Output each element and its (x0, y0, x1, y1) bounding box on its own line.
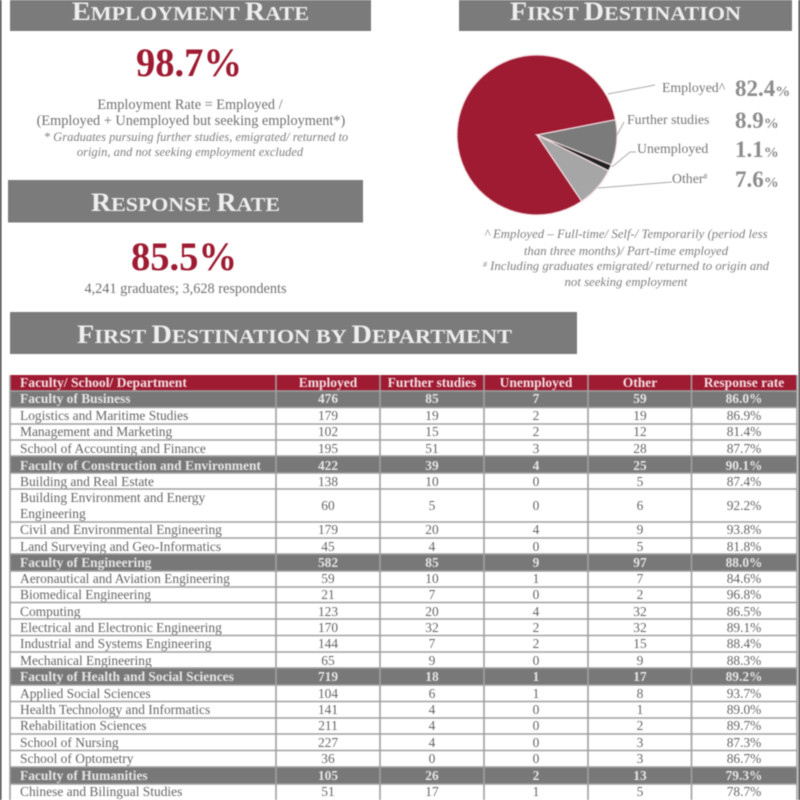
row: health technology (20, 702, 761, 717)
row: electrical: 32 (633, 620, 647, 635)
table header row: Further studies (388, 375, 476, 390)
row: management: 15 (425, 424, 439, 439)
pie footnotes: than three months)/ Part-time employed (524, 244, 729, 258)
row: aeronautical (20, 571, 761, 586)
faculty row: health: Faculty of Health and Social Sciences (20, 669, 234, 684)
row: industrial: Industrial and Systems Engineering (20, 636, 212, 651)
row: civil: 93.8% (727, 522, 761, 537)
row: nursing: 3 (637, 735, 644, 750)
row: optometry: School of Optometry (20, 751, 134, 766)
row: logistics: 86.9% (727, 408, 761, 423)
row: mechanical: 65 (321, 653, 335, 668)
row: aeronautical: 59 (321, 571, 335, 586)
faculty row: construction: 39 (425, 458, 439, 473)
table header row: Unemployed (500, 375, 573, 390)
row: mechanical (20, 653, 761, 668)
legend: other: Other (672, 171, 703, 186)
table: first destination by department (10, 375, 797, 800)
employment rate formula (37, 97, 346, 129)
row: nursing: 0 (533, 735, 540, 750)
row: building environment: Building Environment and Energy (20, 490, 206, 505)
row: building real estate: 5 (637, 474, 644, 489)
legend: further studies: Further studies (627, 112, 709, 127)
row: health technology: 0 (533, 702, 540, 717)
row: computing: 86.5% (727, 604, 761, 619)
row: computing: Computing (20, 604, 81, 619)
legend: employed: 82.4% (735, 76, 790, 101)
row: aeronautical: 7 (637, 571, 644, 586)
row: optometry: 0 (533, 751, 540, 766)
row: civil: 179 (318, 522, 338, 537)
employment rate formula: Employment Rate = Employed / (97, 97, 283, 113)
row: applied social: 104 (318, 686, 338, 701)
row: building environment (20, 490, 761, 521)
faculty row: business: 85 (425, 391, 439, 406)
row: computing: 123 (318, 604, 338, 619)
row: land surveying (20, 539, 761, 554)
legend: unemployed (637, 137, 779, 162)
row: rehabilitation (20, 718, 761, 733)
row: mechanical: 0 (533, 653, 540, 668)
row: land surveying: 5 (637, 539, 644, 554)
row: industrial: 15 (633, 636, 647, 651)
row: applied social: Applied Social Sciences (20, 686, 151, 701)
row: management: 12 (633, 424, 647, 439)
heading: employment rate (10, 0, 371, 31)
row: industrial: 88.4% (727, 636, 761, 651)
row: aeronautical: 84.6% (727, 571, 761, 586)
row: electrical: 89.1% (727, 620, 761, 635)
row: health technology: 141 (318, 702, 338, 717)
pie footnotes: ^ Employed – Full-time/ Self-/ Temporarily (period less (484, 227, 768, 241)
employment rate note: * Graduates pursuing further studies, emigrated/ returned to (44, 130, 348, 144)
row: land surveying: 81.8% (727, 539, 761, 554)
row: building real estate: 0 (533, 474, 540, 489)
row: aeronautical: Aeronautical and Aviation Engineering (20, 571, 230, 586)
row: chinese and bilingual: 17 (425, 784, 439, 799)
row: industrial: 144 (318, 636, 338, 651)
pie footnotes: Including graduates emigrated/ returned to origin and (487, 259, 770, 273)
row: optometry: 0 (429, 751, 436, 766)
row: electrical: 2 (533, 620, 539, 635)
row: building real estate: 10 (425, 474, 439, 489)
row: aeronautical: 10 (425, 571, 439, 586)
row: rehabilitation: 4 (429, 718, 436, 733)
row: aeronautical: 1 (533, 571, 539, 586)
employment rate formula: (Employed + Unemployed but seeking employment*) (37, 113, 346, 129)
faculty row: health (10, 668, 797, 685)
row: building real estate: Building and Real Estate (20, 474, 154, 489)
row: accounting: 195 (318, 441, 338, 456)
faculty row: construction: 4 (533, 458, 540, 473)
row: chinese and bilingual: 1 (533, 784, 539, 799)
row: electrical: Electrical and Electronic Engineering (20, 620, 222, 635)
row: applied social (20, 686, 761, 701)
table header row: Faculty/ School/ Department (20, 375, 187, 390)
faculty row: health: 1 (533, 669, 539, 684)
legend: further studies: 8.9% (735, 108, 779, 133)
faculty row: construction: 422 (318, 458, 338, 473)
faculty row: engineering: 582 (318, 555, 338, 570)
faculty row: engineering: 85 (425, 555, 439, 570)
row: biomedical: 0 (533, 587, 540, 602)
heading: first destination (459, 0, 792, 31)
row: electrical (20, 620, 761, 635)
faculty row: business: 476 (318, 391, 338, 406)
pie footnotes: not seeking employment (565, 275, 688, 289)
row: accounting: School of Accounting and Finance (20, 441, 206, 456)
faculty row: engineering: 97 (633, 555, 647, 570)
row: rehabilitation: Rehabilitation Sciences (20, 718, 147, 733)
row: rehabilitation: 211 (318, 718, 338, 733)
row: logistics: 19 (633, 408, 647, 423)
row: civil (20, 522, 761, 537)
faculty row: humanities: 2 (533, 768, 540, 783)
row: nursing: 87.3% (727, 735, 761, 750)
faculty row: engineering: 9 (533, 555, 540, 570)
row: land surveying: 45 (321, 539, 335, 554)
row: building environment: 5 (429, 498, 436, 513)
legend: other (672, 167, 779, 192)
row: building environment: 60 (321, 498, 335, 513)
row: chinese and bilingual: 78.7% (727, 784, 761, 799)
row: industrial: 7 (429, 636, 436, 651)
row: chinese and bilingual: Chinese and Bilingual Studies (20, 784, 182, 799)
row: building environment: 6 (637, 498, 644, 513)
row: biomedical: 21 (321, 587, 335, 602)
row: building real estate: 87.4% (727, 474, 761, 489)
heading: response rate (8, 180, 363, 222)
pie footnotes (483, 227, 770, 289)
row: chinese and bilingual (20, 784, 761, 799)
faculty row: health: 719 (318, 669, 338, 684)
employment rate note (44, 130, 348, 159)
row: health technology: 4 (429, 702, 436, 717)
faculty row: humanities: 26 (425, 768, 439, 783)
row: optometry: 36 (321, 751, 335, 766)
row: management (20, 424, 761, 439)
row: mechanical: Mechanical Engineering (20, 653, 152, 668)
table header row: Other (623, 375, 657, 390)
row: computing: 4 (533, 604, 540, 619)
row: civil: 20 (425, 522, 439, 537)
row: computing (20, 604, 761, 619)
row: logistics: Logistics and Maritime Studies (20, 408, 188, 423)
row: health technology: Health Technology and Informatics (20, 702, 210, 717)
row: chinese and bilingual: 51 (321, 784, 335, 799)
row: civil: 9 (637, 522, 644, 537)
faculty row: business: 7 (533, 391, 540, 406)
faculty row: health: 18 (425, 669, 439, 684)
row: chinese and bilingual: 5 (637, 784, 644, 799)
row: mechanical: 9 (637, 653, 644, 668)
row: applied social: 6 (429, 686, 436, 701)
row: industrial (20, 636, 761, 651)
row: biomedical: 7 (429, 587, 436, 602)
row: optometry (20, 751, 761, 766)
row: land surveying: 4 (429, 539, 436, 554)
row: building environment: 92.2% (727, 498, 761, 513)
legend: employed: Employed^ (662, 80, 726, 95)
row: logistics (20, 408, 761, 423)
row: management: 81.4% (727, 424, 761, 439)
row: accounting: 87.7% (727, 441, 761, 456)
faculty row: health: 89.2% (726, 669, 762, 684)
row: rehabilitation: 0 (533, 718, 540, 733)
faculty row: engineering: Faculty of Engineering (20, 555, 152, 570)
row: biomedical: Biomedical Engineering (20, 587, 151, 602)
row: accounting: 51 (425, 441, 439, 456)
legend: further studies (627, 108, 779, 133)
row: management: 102 (318, 424, 338, 439)
pie footnotes: # (483, 260, 488, 269)
legend: unemployed: 1.1% (735, 137, 779, 162)
faculty row: business: 86.0% (726, 391, 762, 406)
panel: response rate (8, 180, 363, 297)
row: management: 2 (533, 424, 539, 439)
row: nursing (20, 735, 761, 750)
row: electrical: 32 (425, 620, 439, 635)
heading: response rate: RESPONSE RATE (91, 188, 280, 217)
legend: unemployed: Unemployed (637, 141, 708, 156)
faculty row: business (10, 391, 797, 407)
row: accounting (20, 441, 761, 456)
faculty row: engineering (10, 554, 797, 571)
row: health technology: 89.0% (727, 702, 761, 717)
legend: employed (662, 76, 790, 101)
row: industrial: 2 (533, 636, 539, 651)
panel: first destination (457, 0, 792, 289)
row: rehabilitation: 2 (637, 718, 643, 733)
table header row: Response rate (704, 375, 784, 390)
heading: first destination by department (10, 312, 577, 354)
faculty row: construction: Faculty of Construction and Environment (20, 458, 261, 473)
row: logistics: 179 (318, 408, 338, 423)
table header row (10, 375, 797, 391)
row: management: Management and Marketing (20, 424, 173, 439)
row: mechanical: 9 (429, 653, 436, 668)
response rate value: 85.5% (131, 234, 237, 279)
row: applied social: 8 (637, 686, 644, 701)
panel: employment rate (10, 0, 371, 159)
faculty row: humanities: 105 (318, 768, 338, 783)
row: building real estate: 138 (318, 474, 338, 489)
response rate detail: 4,241 graduates; 3,628 respondents (84, 281, 287, 297)
faculty row: humanities (10, 767, 797, 784)
row: nursing: 227 (318, 735, 338, 750)
table header row: Employed (299, 375, 358, 390)
row: computing: 32 (633, 604, 647, 619)
row: accounting: 28 (633, 441, 647, 456)
row: applied social: 93.7% (727, 686, 761, 701)
faculty row: humanities: 79.3% (726, 768, 762, 783)
employment rate note: origin, and not seeking employment excluded (77, 145, 304, 159)
faculty row: business: Faculty of Business (20, 391, 130, 406)
row: building real estate (20, 474, 761, 489)
row: electrical: 170 (318, 620, 338, 635)
faculty row: humanities: Faculty of Humanities (20, 768, 148, 783)
row: optometry: 86.7% (727, 751, 761, 766)
row: computing: 20 (425, 604, 439, 619)
row: nursing: 4 (429, 735, 436, 750)
row: accounting: 3 (533, 441, 540, 456)
row: logistics: 2 (533, 408, 539, 423)
heading: first destination by department: FIRST DESTINATION BY DEPARTMENT (77, 320, 512, 349)
faculty row: construction: 25 (633, 458, 647, 473)
faculty row: engineering: 88.0% (726, 555, 762, 570)
legend: other: 7.6% (735, 167, 779, 192)
leader lines (598, 85, 672, 188)
legend: other: # (703, 172, 707, 181)
row: applied social: 1 (533, 686, 539, 701)
row: mechanical: 88.3% (727, 653, 761, 668)
faculty row: humanities: 13 (633, 768, 647, 783)
faculty row: construction: 90.1% (726, 458, 762, 473)
row: biomedical (20, 587, 761, 602)
row: nursing: School of Nursing (20, 735, 119, 750)
row: civil: Civil and Environmental Engineering (20, 522, 222, 537)
row: land surveying: Land Surveying and Geo-Informatics (20, 539, 221, 554)
row: building environment: 0 (533, 498, 540, 513)
faculty row: construction (10, 456, 797, 473)
row: building environment: Engineering (20, 506, 86, 521)
pie chart (457, 55, 617, 215)
row: health technology: 1 (637, 702, 643, 717)
row: biomedical: 2 (637, 587, 643, 602)
row: biomedical: 96.8% (727, 587, 761, 602)
row: civil: 4 (533, 522, 540, 537)
row: optometry: 3 (637, 751, 644, 766)
faculty row: health: 17 (633, 669, 647, 684)
row: logistics: 19 (425, 408, 439, 423)
row: land surveying: 0 (533, 539, 540, 554)
faculty row: business: 59 (633, 391, 647, 406)
employment rate value: 98.7% (136, 40, 242, 85)
row: rehabilitation: 89.7% (727, 718, 761, 733)
